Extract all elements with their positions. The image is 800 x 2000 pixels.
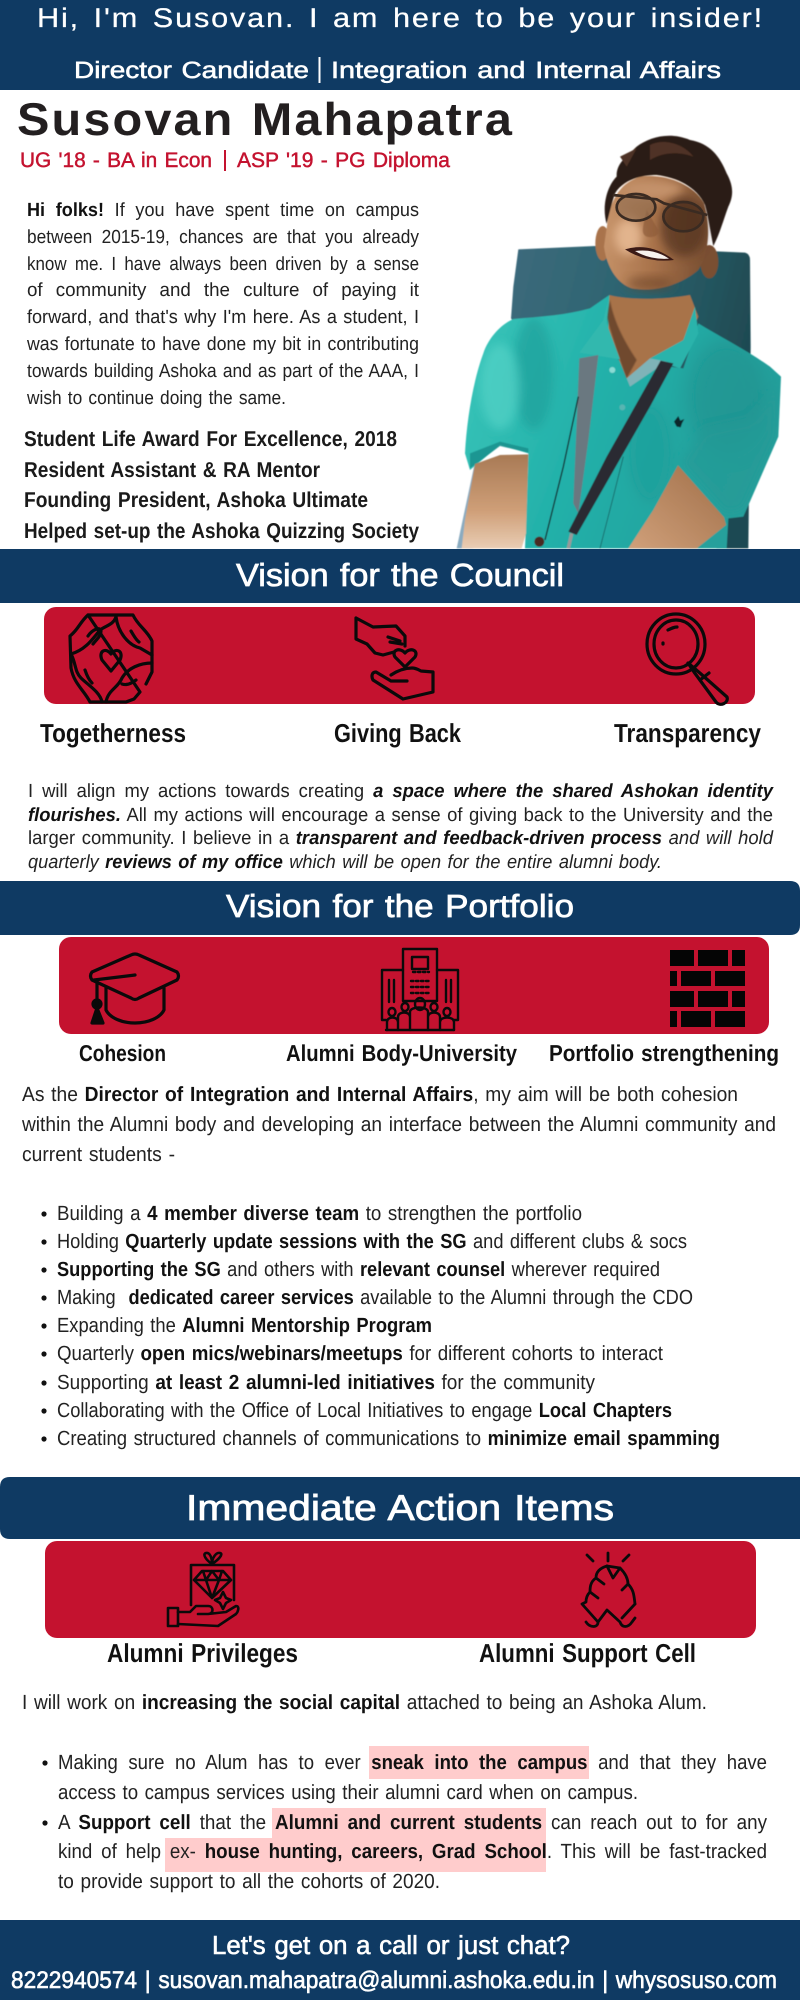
portfolio paragraph: current students - bbox=[22, 1143, 175, 1166]
lanyards bbox=[573, 355, 598, 513]
label: Portfolio strengthening: Portfolio strengthening bbox=[549, 1040, 779, 1066]
portfolio bullet list: Supporting the SG and others with relevant counsel wherever required bbox=[57, 1258, 660, 1281]
panel: council values icons bbox=[44, 607, 755, 704]
icon: graduation cap bbox=[90, 954, 178, 1023]
candidate role: Director Candidate bbox=[74, 57, 309, 83]
portrait photo bbox=[457, 136, 781, 548]
achievements list: Resident Assistant & RA Mentor bbox=[24, 458, 321, 482]
portfolio bullet list: Collaborating with the Office of Local Initiatives to engage Local Chapters bbox=[57, 1399, 672, 1422]
highlights and action bullets bbox=[42, 1746, 768, 1893]
candidate role bbox=[74, 57, 721, 83]
portfolio bullet list: Creating structured channels of communications to minimize email spamming bbox=[57, 1427, 720, 1450]
portfolio paragraph bbox=[21, 1083, 776, 1166]
header banner bbox=[0, 0, 800, 90]
section heading: Immediate Action Items: Immediate Action Items bbox=[186, 1487, 614, 1528]
label: Giving Back: Giving Back bbox=[334, 718, 461, 748]
icon: clasped hands bbox=[582, 1553, 635, 1626]
introduction text: know me. I have always been driven by a sense bbox=[27, 254, 419, 275]
introduction text: forward, and that's why I'm here. As a student, I bbox=[27, 307, 419, 328]
highlights and action bullets: A Support cell that the Alumni and current students can reach out to for any bbox=[58, 1811, 768, 1834]
council vision paragraph: I will align my actions towards creating a space where the shared Ashokan identity bbox=[28, 781, 774, 802]
panel: action item icons bbox=[45, 1541, 756, 1638]
hair bbox=[605, 136, 732, 246]
icon: giving back hand and heart bbox=[356, 618, 433, 699]
highlights and action bullets: to provide support to all the cohorts of 2020. bbox=[58, 1870, 440, 1893]
footer contact details: 8222940574 | susovan.mahapatra@alumni.ashoka.edu.in | whysosuso.com bbox=[11, 1967, 777, 1994]
icon: togetherness hands and heart bbox=[70, 615, 152, 702]
portfolio bullet list: Quarterly open mics/webinars/meetups for different cohorts to interact bbox=[57, 1342, 663, 1365]
smile bbox=[625, 247, 674, 261]
icon: gift with diamond in hand bbox=[168, 1553, 238, 1626]
section heading: Vision for the Portfolio: Vision for the Portfolio bbox=[226, 888, 574, 924]
forearms bbox=[462, 454, 528, 548]
introduction text bbox=[26, 200, 420, 409]
council vision paragraph: flourishes. All my actions will encourage a sense of giving back to the University and the bbox=[28, 805, 773, 826]
collar bbox=[579, 295, 620, 359]
degrees line: ASP '19 - PG Diploma bbox=[237, 149, 450, 172]
council vision paragraph bbox=[28, 781, 774, 873]
footer contact banner bbox=[0, 1920, 800, 2000]
highlights and action bullets: kind of help ex- house hunting, careers, Grad School. This will be fast-tracked bbox=[58, 1840, 767, 1863]
achievements list bbox=[24, 427, 419, 543]
glasses bbox=[613, 194, 707, 231]
ears bbox=[595, 226, 610, 261]
label: Alumni Body-University: Alumni Body-University bbox=[286, 1040, 517, 1066]
label: Transparency: Transparency bbox=[614, 718, 761, 748]
portfolio bullet list: Building a 4 member diverse team to strengthen the portfolio bbox=[57, 1202, 582, 1225]
label: Cohesion: Cohesion bbox=[79, 1040, 166, 1066]
portfolio bullet list: Making dedicated career services available to the Alumni through the CDO bbox=[57, 1286, 693, 1309]
portfolio bullet list: Expanding the Alumni Mentorship Program bbox=[57, 1314, 432, 1337]
chair bbox=[511, 246, 751, 548]
achievements list: Student Life Award For Excellence, 2018 bbox=[24, 427, 397, 451]
candidate name: Susovan Mahapatra bbox=[17, 93, 514, 145]
action items intro: I will work on increasing the social capital attached to being an Ashoka Alum. bbox=[22, 1691, 707, 1714]
introduction text: of community and the culture of paying it bbox=[27, 280, 420, 301]
degrees line bbox=[20, 149, 450, 172]
footer call to action: Let's get on a call or just chat? bbox=[212, 1930, 570, 1960]
icon: university building with people bbox=[382, 949, 458, 1030]
panel: portfolio icons bbox=[59, 937, 769, 1034]
icon: brick wall bbox=[670, 950, 745, 1027]
section heading: Vision for the Council bbox=[0, 549, 800, 603]
introduction text: between 2015-19, chances are that you already bbox=[27, 227, 419, 248]
section heading: Immediate Action Items bbox=[0, 1477, 800, 1539]
neck bbox=[608, 295, 698, 378]
portfolio bullet list: Holding Quarterly update sessions with the SG and different clubs & socs bbox=[57, 1230, 687, 1253]
portfolio bullet list bbox=[41, 1202, 720, 1450]
label: Togetherness: Togetherness bbox=[40, 718, 186, 748]
highlights and action bullets: access to campus services using their alumni card when on campus. bbox=[58, 1781, 638, 1804]
label: Alumni Privileges: Alumni Privileges bbox=[107, 1638, 298, 1668]
introduction text: towards building Ashoka and as part of the AAA, I bbox=[27, 361, 419, 382]
section heading: Vision for the Portfolio bbox=[0, 881, 800, 935]
section heading: Vision for the Council: Vision for the Council bbox=[236, 557, 564, 593]
header greeting: Hi, I'm Susovan. I am here to be your insider! bbox=[37, 3, 764, 33]
council vision paragraph: larger community. I believe in a transparent and feedback-driven process and will hold bbox=[28, 828, 774, 849]
degrees line: UG '18 - BA in Econ bbox=[20, 149, 212, 172]
introduction text: Hi folks! If you have spent time on campus bbox=[27, 200, 419, 221]
achievements list: Helped set-up the Ashoka Quizzing Society bbox=[24, 519, 419, 543]
achievements list: Founding President, Ashoka Ultimate bbox=[24, 488, 368, 512]
icon: magnifying glass bbox=[647, 614, 727, 704]
shirt bbox=[465, 295, 781, 548]
portfolio bullet list: Supporting at least 2 alumni-led initiatives for the community bbox=[57, 1371, 596, 1394]
introduction text: was fortunate to have done my bit in contributing bbox=[26, 334, 419, 355]
shirt shading bbox=[480, 317, 778, 513]
face bbox=[604, 176, 708, 290]
highlights and action bullets: Making sure no Alum has to ever sneak into the campus and that they have bbox=[58, 1751, 767, 1774]
council vision paragraph: quarterly reviews of my office which will be open for the entire alumni body. bbox=[28, 852, 662, 873]
introduction text: wish to continue doing the same. bbox=[26, 388, 286, 409]
label: Alumni Support Cell: Alumni Support Cell bbox=[479, 1638, 696, 1668]
candidate role: Integration and Internal Affairs bbox=[331, 57, 721, 83]
portfolio paragraph: As the Director of Integration and Internal Affairs, my aim will be both cohesion bbox=[22, 1083, 738, 1106]
